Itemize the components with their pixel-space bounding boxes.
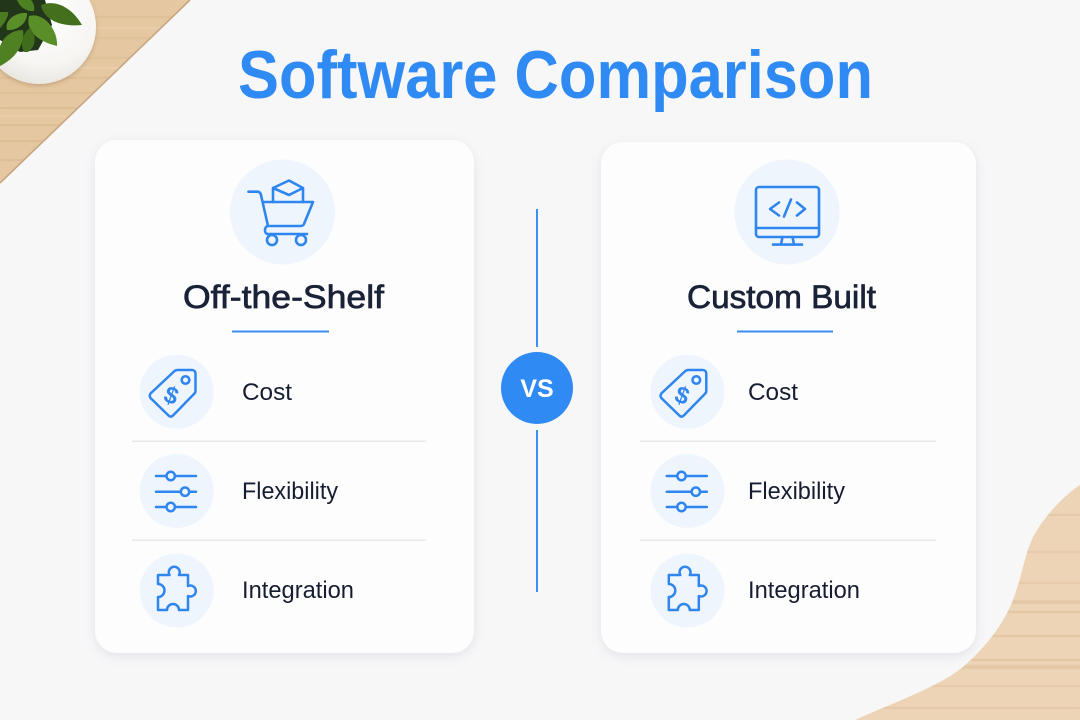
icon: sliders — [650, 454, 724, 528]
label: Cost — [242, 379, 292, 406]
label: Integration — [242, 577, 354, 604]
icon: price tag — [140, 355, 214, 429]
wood corner: top left — [0, 0, 190, 183]
row: Cost — [650, 355, 798, 429]
label: Cost — [748, 379, 798, 406]
VS divider — [501, 209, 573, 592]
row: Integration — [140, 554, 354, 628]
VS badge — [501, 352, 573, 424]
row: Flexibility — [140, 454, 338, 528]
label: Flexibility — [748, 478, 845, 505]
pot — [0, 0, 96, 84]
heading: Custom Built — [687, 279, 876, 315]
row: Integration — [650, 554, 860, 628]
icon: puzzle piece — [650, 554, 724, 628]
icon: price tag — [650, 355, 724, 429]
icon: sliders — [140, 454, 214, 528]
icon: price tag: $ — [160, 381, 183, 411]
plant in white pot — [0, 0, 96, 84]
icon: shopping cart with box — [230, 160, 335, 264]
label: Flexibility — [242, 478, 338, 505]
icon: monitor with code — [734, 160, 840, 264]
heading: Off-the-Shelf — [183, 279, 384, 315]
panel: Custom Built — [601, 142, 976, 653]
icon: price tag: $ — [671, 381, 693, 411]
wood corner: bottom right — [855, 485, 1080, 720]
panel: Off-the-Shelf — [95, 140, 474, 653]
VS divider: VS — [520, 375, 554, 403]
leaves — [0, 0, 82, 66]
row: Flexibility — [650, 454, 845, 528]
heading underline — [737, 330, 833, 332]
row: Cost — [140, 355, 292, 429]
heading underline — [232, 330, 329, 332]
label: Integration — [748, 577, 860, 604]
icon: puzzle piece — [140, 554, 214, 628]
title: Software Comparison — [238, 37, 873, 113]
